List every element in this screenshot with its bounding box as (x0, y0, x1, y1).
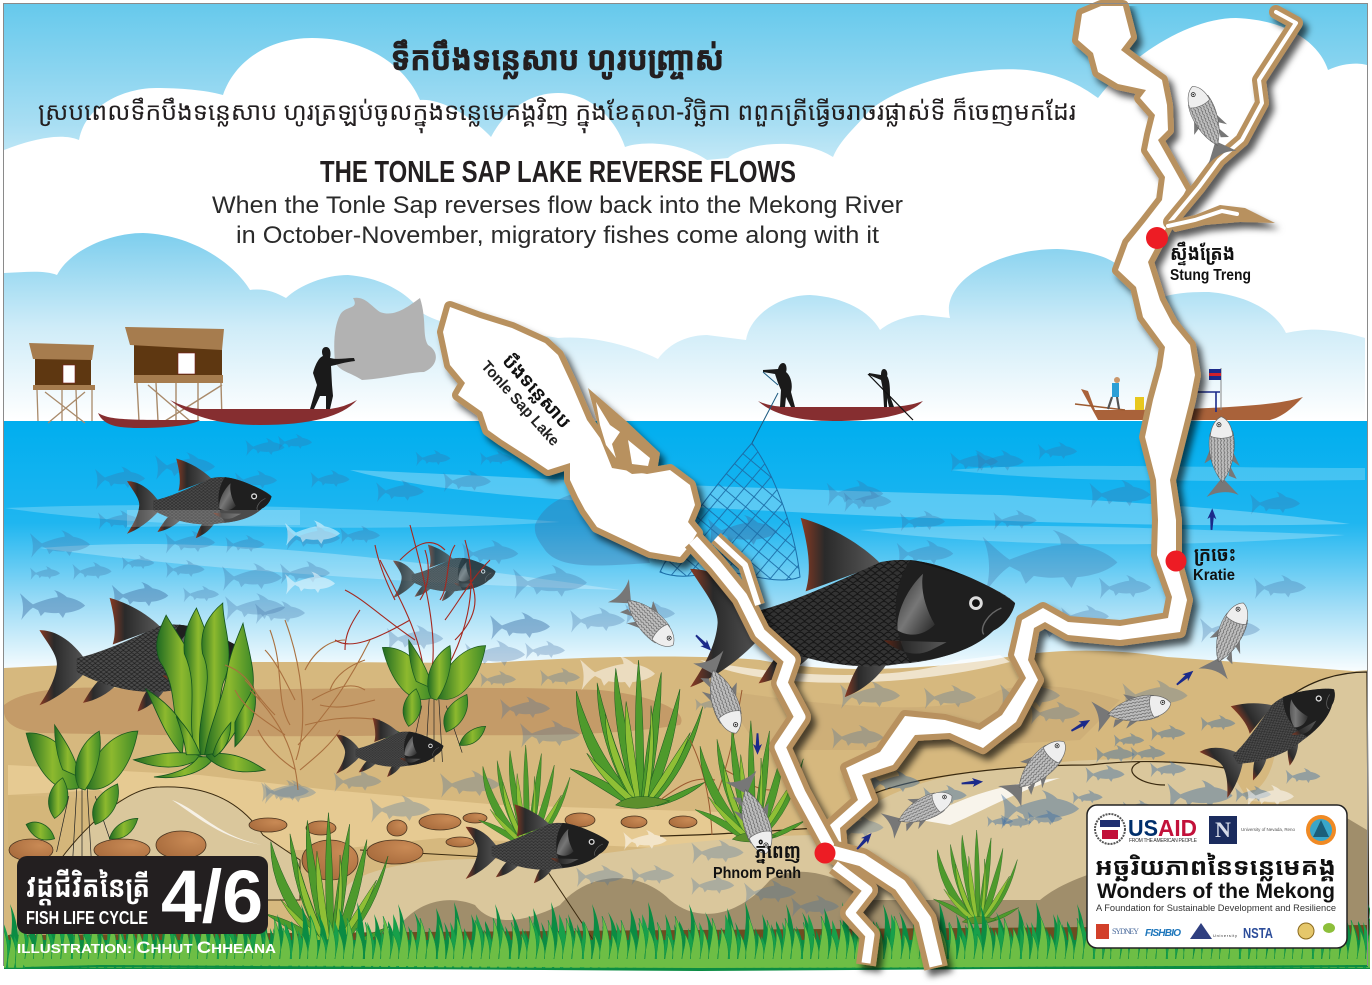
reed plant right (695, 721, 805, 842)
city marker Phnom Penh (713, 837, 836, 882)
hanging fishing net (660, 443, 800, 580)
USAID wordmark: FROM THE AMERICAN PEOPLE (1129, 838, 1198, 844)
delta branches (832, 852, 936, 968)
direction arrows (693, 508, 1217, 852)
throwing fisherman (310, 347, 355, 409)
lake inlet islands (588, 388, 660, 474)
right boat (1075, 368, 1303, 420)
Nevada logo: N (1215, 817, 1231, 842)
reed plant lower center (479, 745, 571, 847)
partner logos row: SYDNEY (1112, 927, 1139, 936)
city marker Phnom Penh: ភ្នំពេញ (755, 837, 801, 865)
dark fish upper left (127, 458, 272, 538)
brown coral right (660, 690, 770, 835)
English title: THE TONLE SAP LAKE REVERSE FLOWS (320, 154, 796, 189)
English description (212, 192, 903, 249)
partner logos row: FISHBIO (1145, 928, 1181, 939)
dark fish center left (336, 718, 443, 777)
ministry seal (1306, 815, 1336, 845)
east tributary (1165, 205, 1275, 232)
Nevada logo (1209, 816, 1295, 844)
dark fish lower right (1188, 656, 1356, 802)
series badge: វដ្តជីវិតនៃត្រី (26, 865, 150, 906)
fisherman 2 (869, 369, 894, 407)
fisherman 1 (763, 363, 795, 407)
lake label (478, 341, 582, 450)
USAID wordmark: US (1128, 815, 1158, 841)
English description: When the Tonle Sap reverses flow back into the Mekong River (212, 192, 903, 219)
small boatman (1108, 377, 1120, 409)
upper right tributary (1170, 12, 1296, 222)
upper white clouds (4, 18, 1367, 300)
lake label: Tonle Sap Lake (478, 358, 563, 450)
city marker Phnom Penh: Phnom Penh (713, 865, 801, 882)
boat flag (1209, 368, 1221, 410)
tonle sap lake (443, 6, 1195, 860)
USAID wordmark (1128, 815, 1198, 844)
partner logos row: University (1213, 933, 1237, 938)
water panel (4, 421, 1367, 676)
fisherman boat left (170, 347, 357, 425)
dark fish lower center (466, 804, 609, 883)
ghost fish schools (30, 434, 1306, 917)
dark fish under red coral (393, 545, 496, 601)
Khmer project name: អច្ឆរិយភាពនៃទន្លេមេគង្គ (1095, 850, 1336, 883)
mekong river map (443, 6, 1296, 968)
partner logos row (1096, 923, 1335, 942)
red coral (335, 525, 490, 690)
small red boat (98, 413, 200, 428)
reed plant lower left (265, 813, 390, 950)
USAID wordmark: AID (1158, 815, 1197, 841)
large ghost fish behind lake (535, 490, 650, 565)
sky panel (4, 4, 1367, 421)
tonle sap channel (693, 540, 830, 848)
arrowhead plant left (26, 725, 138, 857)
brown coral (225, 620, 380, 790)
Khmer subtitle: ស្របពេលទឹកបឹងទន្លេសាប ហូរត្រឡប់ចូលក្នុងទន្លេមេគង្គវិញ ក្នុងខែតុលា-វិច្ឆិកា ពពួកត្រីធ្វើចរាចរផ្លាស់ទី ក៏ចេញមកដែរ (38, 94, 1076, 134)
city marker Stung Treng (1146, 227, 1251, 284)
city marker Kratie (1166, 540, 1236, 584)
illustration credit: ILLUSTRATION: CHHUT CHHEANA (17, 938, 277, 957)
Nevada logo: University of Nevada, Reno (1241, 827, 1295, 832)
grass (4, 900, 1370, 970)
kelp plant (134, 603, 265, 778)
pebbles (9, 813, 697, 880)
city marker Stung Treng: Stung Treng (1170, 267, 1251, 284)
tagline: A Foundation for Sustainable Development and Resilience (1096, 903, 1336, 914)
lower blue clouds (4, 233, 1365, 421)
city marker Stung Treng: ស្ទឹងត្រែង (1170, 239, 1235, 266)
mekong main channel (822, 6, 1195, 860)
decorative white streaks in water (5, 466, 1365, 845)
stilt house small (29, 343, 95, 423)
dark fish behind kelp (39, 598, 246, 712)
series badge: 4/6 (161, 855, 263, 938)
reed plant delta (933, 830, 1019, 924)
Khmer title: ទឹកបឹងទន្លេសាប ហូរបញ្ច្រាស់ (391, 35, 724, 80)
project name: Wonders of the Mekong (1097, 879, 1335, 903)
city marker Kratie: Kratie (1193, 567, 1235, 584)
series badge: FISH LIFE CYCLE (26, 908, 148, 928)
arrowhead plant center (382, 640, 486, 762)
throwing net cloud (334, 298, 436, 380)
English description: in October-November, migratory fishes come along with it (236, 222, 879, 249)
silver migrating fish (606, 80, 1259, 859)
city marker Kratie: ក្រចេះ (1194, 540, 1236, 567)
sand bed panel (4, 651, 1369, 968)
USAID seal (1095, 814, 1125, 844)
center boat with fishermen (752, 363, 923, 443)
light rock slabs (330, 760, 1260, 960)
large migrating fish (690, 518, 1015, 697)
lake label: បឹងទន្លេសាប (497, 348, 578, 434)
series badge (17, 855, 268, 938)
partner logo panel (1087, 805, 1347, 948)
reed plant center (570, 660, 705, 808)
stilt house large (125, 327, 224, 421)
partner logos row: NSTA (1243, 925, 1273, 942)
